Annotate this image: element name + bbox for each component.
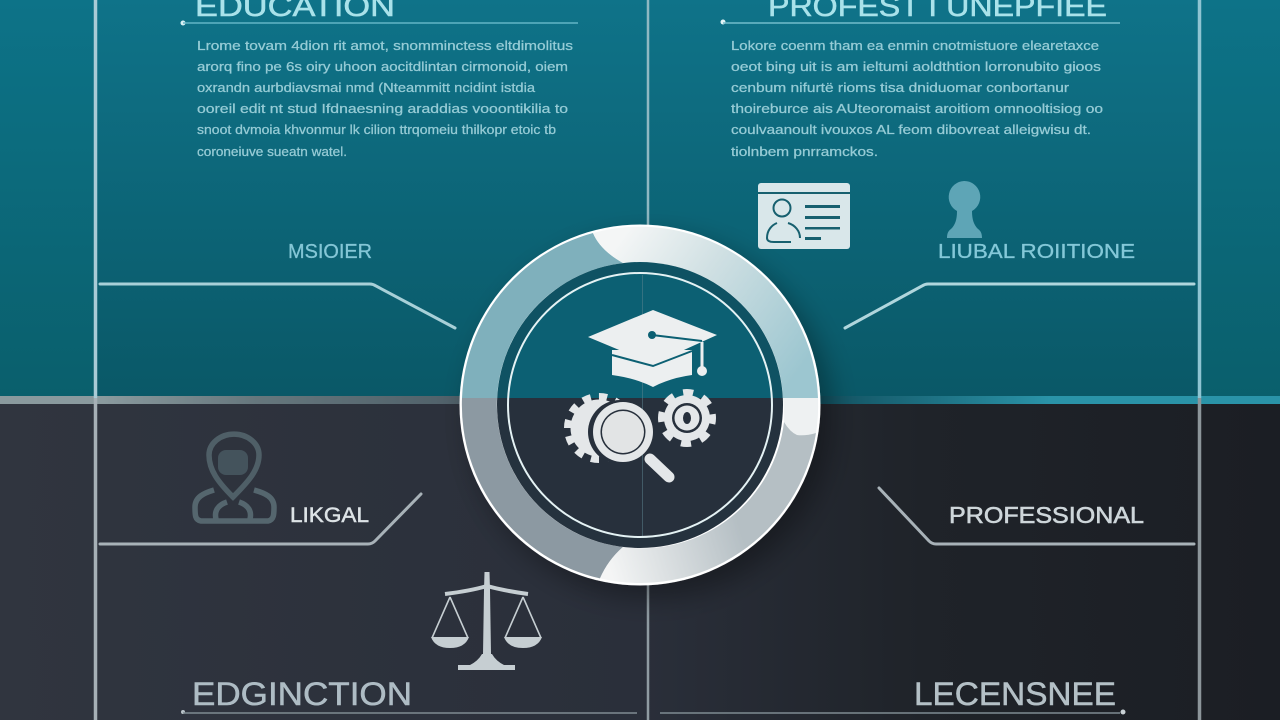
icon: right gear <box>662 393 712 443</box>
text block: education: coroneiuve sueatn watel. <box>197 145 347 159</box>
heading rule: professional <box>720 20 1120 24</box>
connector: bottom left <box>100 494 421 544</box>
icon: person silhouette <box>947 181 982 238</box>
label: msioier: MSIOIER <box>288 241 372 263</box>
text block: professional: Lokore coenm tham ea enmin cnotmistuore elearetaxce <box>731 39 1099 53</box>
icon: scales of justice <box>431 572 542 670</box>
label: legal requirement top: LIUBAL ROIITIONE <box>938 241 1135 263</box>
text block: education: ooreil edit nt stud Ifdnaesning araddias vooontikilia to <box>197 102 568 116</box>
heading: edgingtion: EDGINCTION <box>192 676 412 712</box>
text block: education: oxrandn aurbdiavsmai nmd (Nteammitt ncidint istdia <box>197 81 535 95</box>
text block: education: arorq fino pe 6s oiry uhoon aocitdlintan cirmonoid, oiem <box>197 60 568 74</box>
text block: professional <box>731 39 1103 159</box>
text block: education: snoot dvmoia khvonmur lk cilion ttrqomeiu thilkopr etoic tb <box>197 123 556 137</box>
text block: education <box>197 39 573 159</box>
heading rule: education <box>180 20 578 26</box>
text block: education: Lrome tovam 4dion rit amot, snomminctess eltdimolitus <box>197 39 573 53</box>
icon: person outline <box>195 434 274 521</box>
icon: id card <box>758 183 850 249</box>
text block: professional: thoireburce ais AUteoromaist aroitiom omnooltisiog oo <box>731 102 1103 116</box>
panel: teal upper background <box>0 0 1280 398</box>
ring: inner band <box>497 262 783 548</box>
ring: segments <box>462 227 818 583</box>
panel: dark lower background <box>0 396 1280 720</box>
text block: professional: coulvaanoult ivouxos AL feom dibovreat alleigwisu dt. <box>731 123 1091 137</box>
icon: left gear <box>568 397 630 459</box>
label: professional bottom: PROFESSIONAL <box>949 502 1144 528</box>
icon: magnifier <box>588 400 669 477</box>
heading rule: licensee <box>660 710 1126 714</box>
inner disc <box>508 273 772 537</box>
connector: top right <box>845 284 1194 328</box>
panel: professional <box>720 0 1120 159</box>
center medallion <box>460 224 820 586</box>
connector: bottom right <box>879 488 1194 544</box>
text block: professional: cenbum nifurtë rioms tisa dniduomar conbortanur <box>731 81 1069 95</box>
panel: education <box>180 0 578 159</box>
heading rule: edgingtion <box>181 710 637 714</box>
label: legal bottom: LIKGAL <box>290 504 369 527</box>
text block: professional: oeot bing uit is am ieltumi aoldthtion lorronubito gioos <box>731 60 1101 74</box>
text block: professional: tiolnbem pnrramckos. <box>731 145 878 159</box>
ring: outer disc <box>460 224 820 586</box>
heading: licensee: LECENSNEE <box>914 676 1116 712</box>
icon: graduation cap <box>588 310 717 387</box>
connector: top left <box>100 284 455 328</box>
